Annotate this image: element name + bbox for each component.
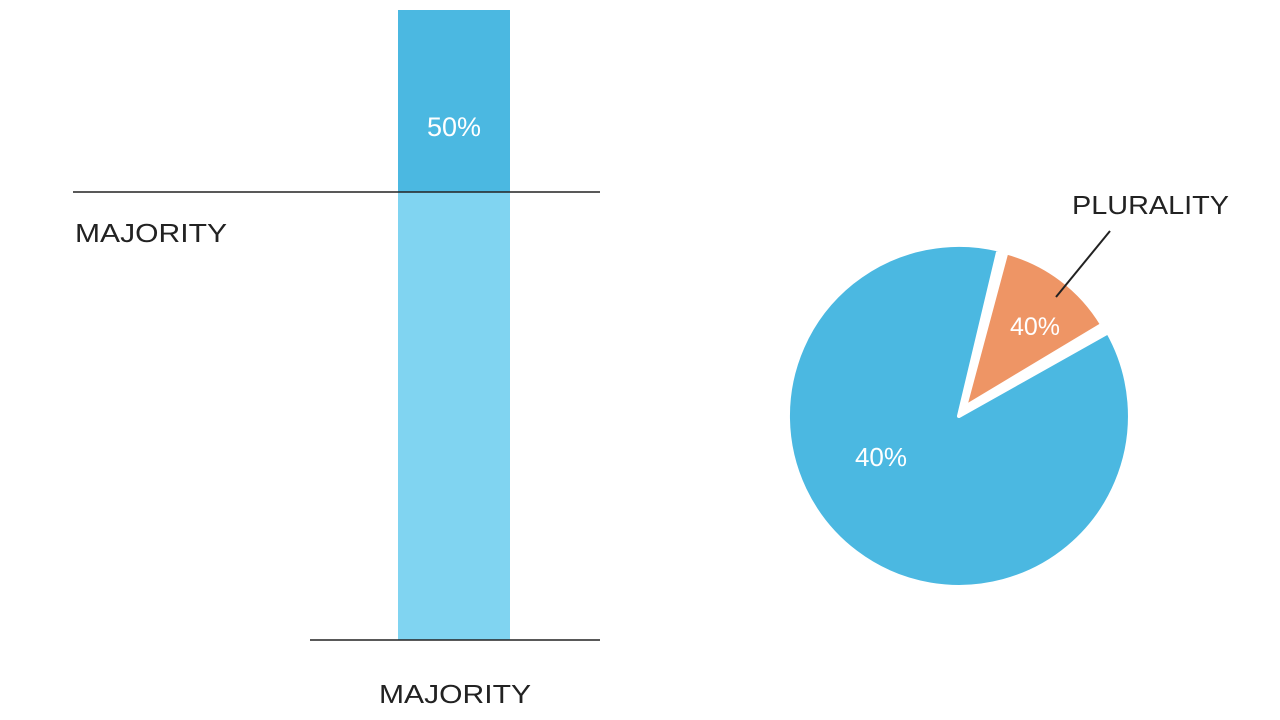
majority threshold line (73, 191, 600, 193)
bar: upper dark segment (398, 10, 510, 192)
baseline (310, 639, 600, 641)
label: MAJORITY bottom: MAJORITY (379, 679, 531, 709)
orange slice (965, 252, 1102, 407)
bar chart: majority (73, 10, 600, 709)
callout line (1056, 231, 1110, 297)
pie chart: plurality (788, 190, 1229, 587)
bar: lower light segment (398, 192, 510, 640)
label: 50%: 50% (427, 112, 481, 142)
label: MAJORITY threshold: MAJORITY (75, 218, 227, 248)
label: PLURALITY: PLURALITY (1072, 190, 1229, 220)
blue slice (788, 245, 1130, 587)
label: blue 40%: 40% (855, 442, 907, 472)
label: orange 40%: 40% (1010, 313, 1060, 341)
